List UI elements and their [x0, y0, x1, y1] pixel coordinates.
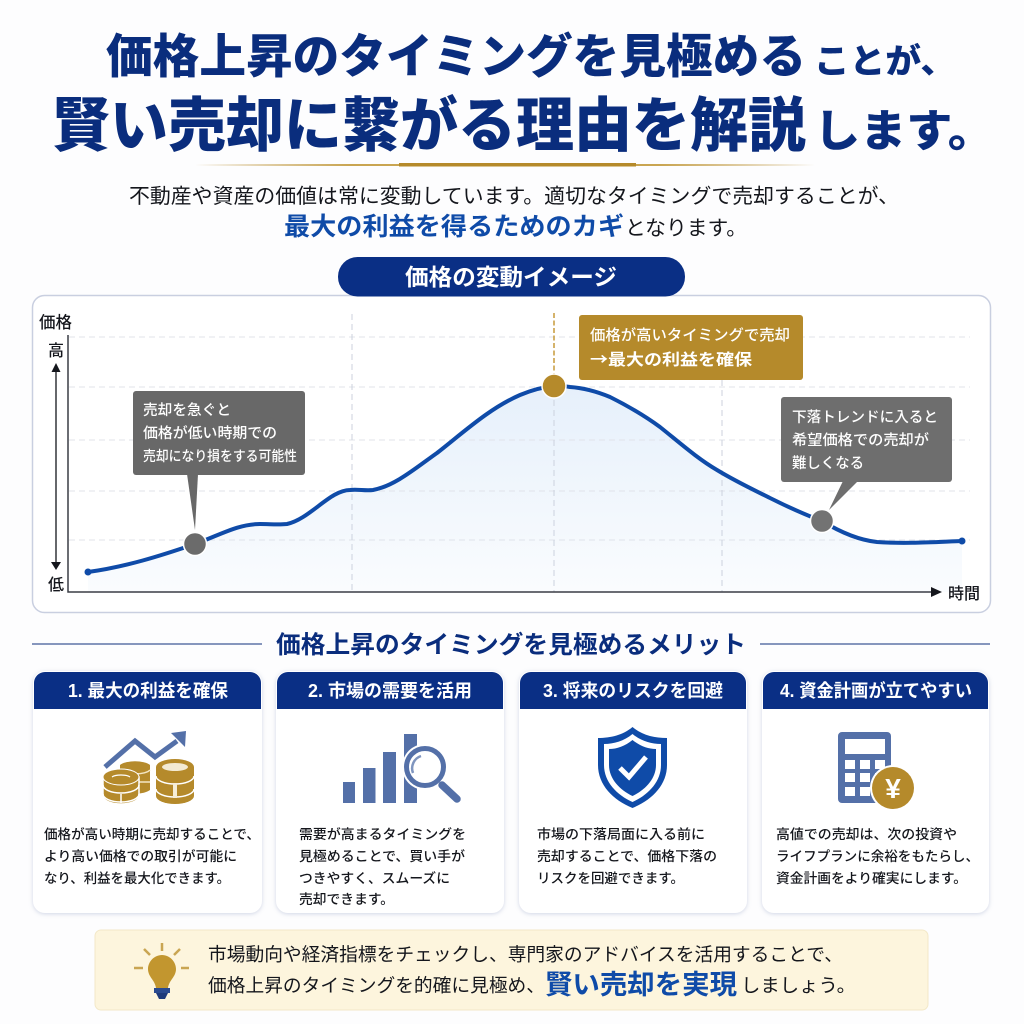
callout: early sale: 売却を急ぐと	[143, 401, 231, 419]
callout banner	[95, 930, 928, 1010]
icon: calculator and yen coin	[838, 732, 916, 811]
body text: 売却することで、価格下落の	[537, 848, 717, 864]
panel: benefit 4	[762, 671, 989, 913]
callout: early sale: 価格が低い時期での	[143, 424, 277, 442]
body text: 売却できます。	[299, 891, 394, 907]
body text: ライフプランに余裕をもたらし、	[776, 849, 979, 864]
body text: 需要が高まるタイミングを	[299, 826, 466, 842]
icon: light bulb	[134, 943, 189, 999]
intro text	[129, 185, 899, 241]
axis labels: 低	[48, 576, 64, 594]
body text: 資金計画をより確実にします。	[776, 871, 967, 886]
body text: より高い価格での取引が可能に	[44, 848, 237, 864]
callout: early sale: 売却になり損をする可能性	[143, 448, 297, 464]
title: 価格上昇のタイミングを見極める	[106, 30, 806, 83]
axis labels	[39, 313, 980, 603]
intro text: 最大の利益を得るためのカギ	[284, 213, 624, 241]
callout: gold peak: →最大の利益を確保	[590, 346, 752, 370]
axes	[68, 335, 936, 592]
callout: downtrend: 下落トレンドに入ると	[792, 409, 938, 426]
body text: 高値での売却は、次の投資や	[776, 826, 957, 842]
body text	[299, 826, 466, 907]
front coin stack	[103, 769, 139, 804]
panel: benefit 3: 3. 将来のリスクを回避	[543, 681, 723, 701]
marker: early sale	[184, 532, 206, 556]
body text: つきやすく、スムーズに	[299, 870, 450, 886]
chart panel	[32, 296, 990, 612]
callout: gold peak	[579, 315, 803, 380]
y scale arrow	[51, 363, 61, 570]
title	[52, 30, 994, 159]
chart title pill: 価格の変動イメージ	[405, 264, 617, 290]
axis labels: 高	[48, 342, 64, 360]
panel: benefit 1	[33, 671, 262, 913]
icon: bar chart with magnifier	[343, 734, 457, 803]
panel: benefit 2: 2. 市場の需要を活用	[308, 681, 472, 701]
panel: benefit 1: 1. 最大の利益を確保	[68, 681, 228, 701]
callout: downtrend: 難しくなる	[792, 455, 864, 472]
price line	[88, 386, 962, 572]
panel: benefit 3	[519, 671, 747, 913]
icon: shield with check	[598, 727, 667, 808]
right coin stack	[156, 759, 194, 804]
body text: リスクを回避できます。	[537, 871, 684, 886]
rear coin stack	[120, 761, 150, 794]
intro text: となります。	[625, 217, 747, 240]
callout: downtrend: 希望価格での売却が	[792, 431, 930, 449]
body text: なり、利益を最大化できます。	[44, 871, 230, 886]
chart title pill	[338, 257, 685, 296]
body text: 価格が高い時期に売却することで、	[44, 826, 260, 842]
callout: gold peak: 価格が高いタイミングで売却	[590, 326, 790, 344]
callout: downtrend	[781, 397, 952, 510]
callout banner: 市場動向や経済指標をチェックし、専門家のアドバイスを活用することで、	[208, 944, 843, 965]
panel: benefit 2	[276, 671, 504, 913]
icon: calculator and yen coin: ¥	[885, 773, 901, 804]
callout banner: しましょう。	[741, 975, 856, 996]
body text: 市場の下落局面に入る前に	[537, 826, 705, 842]
callout: early sale	[133, 391, 305, 530]
marker: downtrend	[810, 510, 834, 532]
body text	[537, 826, 717, 886]
line endpoints	[84, 538, 966, 576]
panel: benefit 4: 4. 資金計画が立てやすい	[780, 680, 972, 701]
peak marker	[542, 313, 566, 398]
body text	[44, 826, 260, 886]
axis labels: 価格	[39, 313, 72, 332]
section heading: 価格上昇のタイミングを見極めるメリット	[276, 630, 746, 659]
body text	[776, 826, 979, 886]
x axis arrowhead	[931, 587, 942, 597]
callout banner: 賢い売却を実現	[545, 970, 737, 1000]
title: ことが、	[814, 42, 956, 81]
body text: 見極めることで、買い手が	[299, 848, 466, 864]
icon: coins and rising arrow	[103, 731, 194, 804]
axis labels: 時間	[948, 585, 980, 603]
title: します。	[814, 107, 994, 156]
callout banner: 価格上昇のタイミングを的確に見極め、	[208, 975, 545, 996]
area under curve	[88, 386, 962, 592]
title: 賢い売却に繋がる理由を解説	[52, 93, 806, 159]
intro text: 不動産や資産の価値は常に変動しています。適切なタイミングで売却することが、	[129, 185, 899, 208]
